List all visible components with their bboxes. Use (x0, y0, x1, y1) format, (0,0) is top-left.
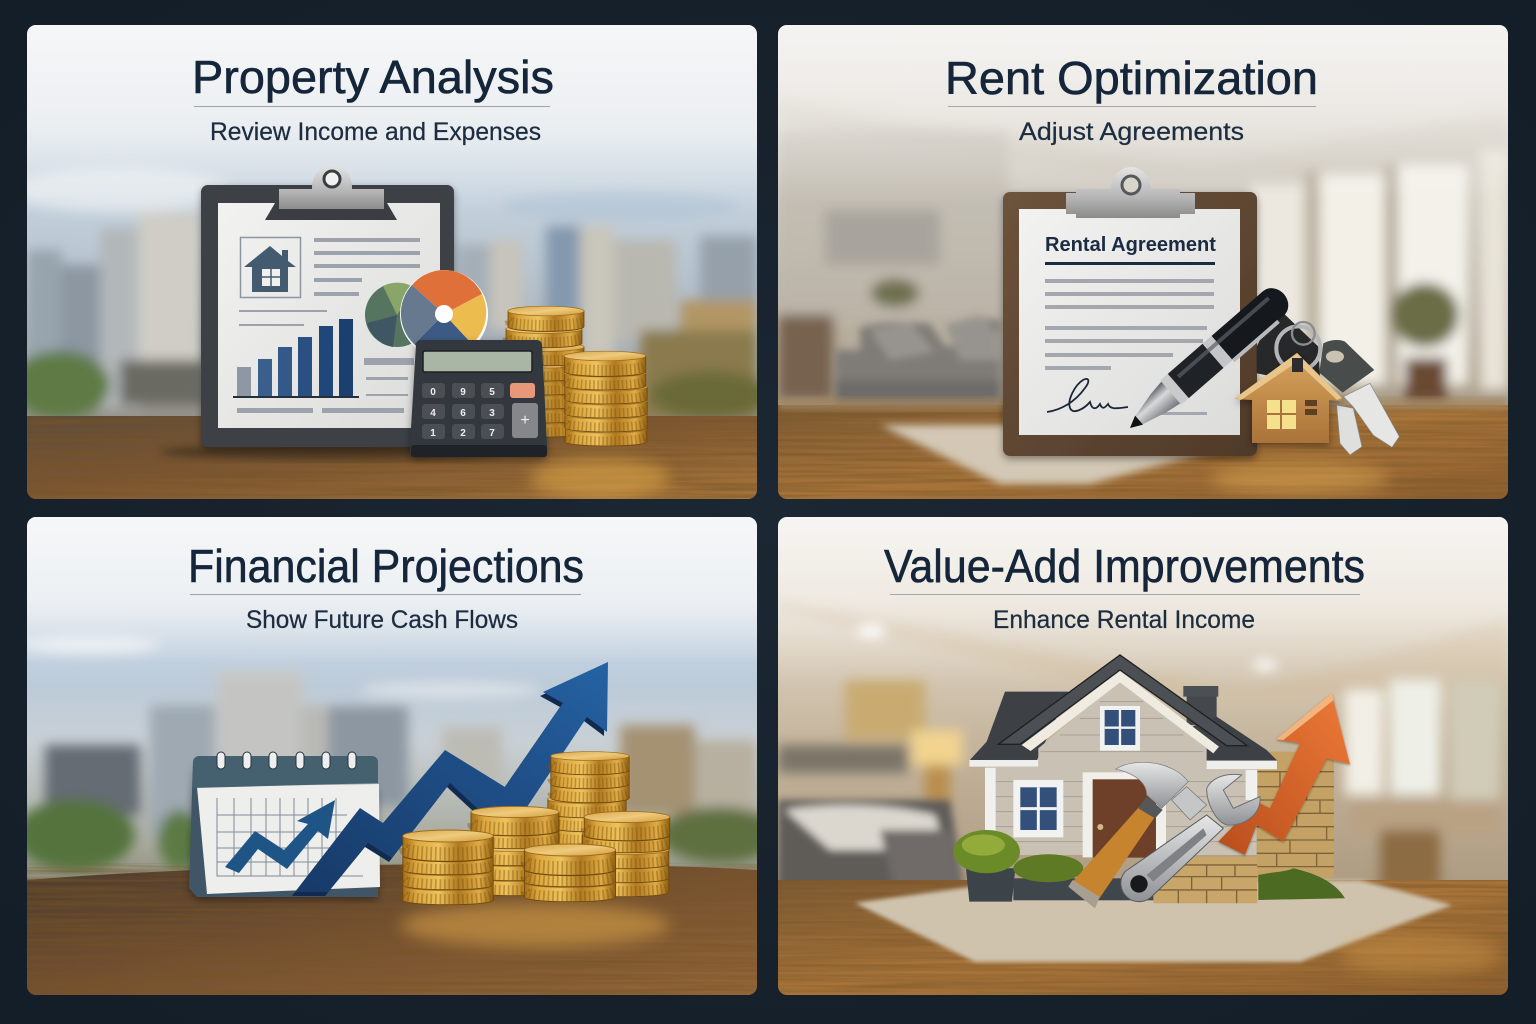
brick walls (1153, 752, 1334, 903)
panel: property analysis (10, 25, 770, 500)
signature (1047, 379, 1128, 412)
icon: calendar with chart (189, 752, 380, 897)
icon: house (240, 238, 300, 298)
shrubs (953, 830, 1345, 900)
calendar grid (217, 798, 363, 876)
icon: back coin stack (548, 752, 629, 846)
lower window (1013, 780, 1063, 837)
title: Property Analysis (192, 51, 554, 103)
title: Rent Optimization (945, 52, 1318, 104)
icon: coin stack front left (403, 830, 493, 905)
icon: keys (1257, 307, 1399, 455)
subtitle: Show Future Cash Flows (246, 606, 518, 634)
title: Financial Projections (188, 540, 584, 592)
icon: coin stack middle (471, 806, 560, 896)
subtitle: Enhance Rental Income (993, 606, 1255, 634)
upper window (1100, 706, 1140, 751)
subtitle: Adjust Agreements (1019, 118, 1244, 146)
side roofs (969, 692, 1277, 769)
gable roof and trim (998, 655, 1247, 753)
calculator: 5 (489, 387, 495, 398)
chimney (1183, 686, 1218, 725)
title fade (778, 517, 1508, 687)
wood floor and rug (778, 880, 1508, 995)
wooden table (27, 864, 757, 995)
door (1083, 772, 1166, 858)
calculator: 1 (430, 428, 436, 439)
wooden table (27, 416, 757, 500)
calculator: 4 (430, 408, 436, 419)
small chart arrow (225, 800, 335, 873)
report text lines (237, 238, 420, 413)
icon: coin stack front centre (524, 844, 616, 902)
sofa (832, 314, 1003, 405)
document heading: Rental Agreement (1045, 234, 1216, 256)
planter and base (966, 868, 1153, 902)
clipboard with rental agreement (1003, 167, 1257, 456)
icon: coin stack front (564, 351, 647, 446)
wood floor and rug (778, 398, 1508, 499)
panel: rent optimization (778, 25, 1508, 499)
house walls (985, 680, 1257, 855)
icon: coin stack back (506, 306, 584, 437)
panel: value-add improvements (778, 517, 1508, 995)
icon: growth arrow (292, 662, 608, 896)
bed (778, 800, 965, 895)
bar chart (233, 319, 359, 398)
calculator: 0 (430, 387, 436, 398)
title fade (27, 517, 757, 663)
icon: coin stack right (582, 811, 670, 897)
clipboard clip (265, 165, 397, 220)
calculator: 7 (489, 428, 495, 439)
panel: financial projections (15, 517, 780, 995)
calculator: + (520, 412, 530, 429)
subtitle: Review Income and Expenses (210, 118, 541, 146)
icon: pen (1130, 288, 1288, 428)
title fade (27, 25, 757, 178)
calculator: 2 (460, 428, 466, 439)
title: Value-Add Improvements (884, 540, 1365, 592)
calculator (410, 340, 547, 457)
city skyline background (27, 517, 757, 880)
calculator: 9 (460, 387, 466, 398)
orange growth arrow (1218, 693, 1350, 855)
title fade (778, 25, 1508, 182)
hammer (1068, 762, 1207, 908)
city skyline background (27, 25, 757, 416)
clipboard clip (1066, 167, 1195, 218)
calculator: 3 (489, 408, 495, 419)
pie charts (365, 270, 488, 348)
living room background (778, 25, 1508, 430)
calculator: 6 (460, 408, 466, 419)
icon: wooden house keychain (1235, 353, 1342, 443)
document text lines (1045, 279, 1214, 415)
clipboard with report (201, 165, 454, 447)
bedroom background (778, 517, 1508, 917)
illustration: house with tools (953, 655, 1350, 908)
wrench (1121, 774, 1260, 902)
